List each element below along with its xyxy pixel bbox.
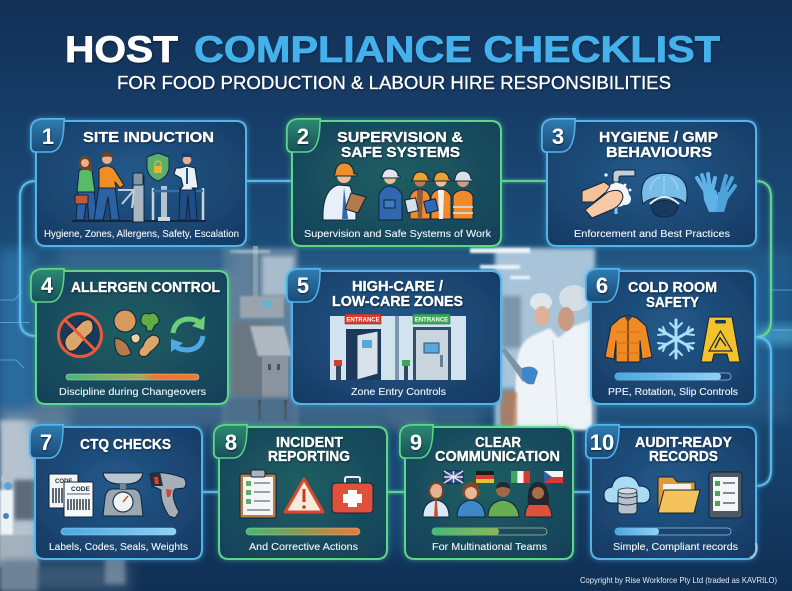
connector lines (20, 181, 771, 492)
icon: language flag bubbles (444, 471, 563, 483)
panel 2: supervision and safe systems (287, 119, 501, 246)
panel 10: audit-ready records: AUDIT-READY (635, 434, 732, 451)
panel 3: hygiene and GMP behaviours: HYGIENE / GMP (599, 129, 718, 146)
connector 7 to 8 (202, 491, 219, 493)
panel 6: cold room safety: SAFETY (646, 294, 699, 311)
panel 1: site induction (31, 119, 246, 246)
panel 5: high-care and low-care zones: HIGH-CARE / (352, 278, 444, 295)
panel 5: high-care and low-care zones (287, 269, 501, 404)
icon: warning triangle (285, 479, 323, 512)
panel 6: cold room safety: COLD ROOM (628, 279, 717, 296)
connector 1 to 2 (246, 180, 292, 182)
panel 9: clear communication: COMMUNICATION (435, 448, 560, 465)
panel 9: clear communication: CLEAR (475, 434, 521, 451)
icon: four multinational people (423, 482, 552, 517)
illustration: two zone entrances (330, 314, 466, 380)
panel 3: hygiene and GMP behaviours: 3 (552, 124, 564, 149)
panel 1: site induction: Hygiene, Zones, Allergens, Safety, Escalation (44, 228, 239, 240)
icon: gloves (697, 174, 735, 212)
icon: wet floor sign (701, 317, 740, 362)
panel 8: incident reporting: REPORTING (268, 448, 350, 465)
panel 8: incident reporting: INCIDENT (276, 434, 343, 451)
panel 1: site induction: SITE INDUCTION (83, 129, 214, 146)
icon: supervisor and workers (323, 163, 473, 220)
panel 1: site induction: 1 (42, 124, 54, 149)
connector 6 to 10 (755, 337, 771, 486)
panel 6: cold room safety (586, 269, 755, 404)
icon: cloud database (604, 476, 650, 514)
panel 2: supervision and safe systems: Supervision and Safe Systems of Work (304, 228, 492, 240)
icon: snowflake (658, 320, 694, 358)
icon: people at turnstile and security guard (72, 152, 206, 222)
background photo: factory floor (0, 246, 792, 591)
panel 4: allergen control: 4 (41, 273, 54, 298)
connector 1 to 4 (20, 181, 36, 336)
icon: barcode labels: CODE (55, 479, 72, 485)
panel 5: high-care and low-care zones: Zone Entry Controls (351, 386, 446, 398)
icon: barcode labels (49, 474, 93, 517)
lab at lower left (0, 405, 70, 429)
panel 10: audit-ready records: 10 (590, 430, 614, 455)
panel 7: CTQ checks: Labels, Codes, Seals, Weights (49, 541, 188, 553)
panel 3: hygiene and GMP behaviours (542, 119, 756, 246)
panel 9: clear communication (400, 425, 573, 559)
panel 7: CTQ checks: 7 (40, 430, 52, 455)
panel 6: cold room safety: PPE, Rotation, Slip Controls (608, 386, 738, 398)
panel 10: audit-ready records: RECORDS (649, 448, 718, 465)
panel 5: high-care and low-care zones: 5 (297, 273, 309, 298)
panel 4: allergen control (31, 269, 228, 404)
panel 7: CTQ checks: CTQ CHECKS (80, 436, 171, 453)
progress bar: 90 percent (615, 373, 731, 380)
circuit glow, left and right (0, 250, 792, 550)
icon: no peanuts (58, 314, 102, 356)
panel 9: clear communication: 9 (410, 430, 422, 455)
icon: changeover arrows (171, 316, 205, 352)
progress bar: 58 percent (432, 528, 547, 535)
icon: first aid kit (332, 477, 373, 513)
panel 5: high-care and low-care zones: LOW-CARE ZONES (332, 293, 463, 310)
panel 8: incident reporting: And Corrective Actions (249, 541, 358, 553)
icon: barcode scanner (150, 472, 186, 518)
lab room behind workers (495, 248, 595, 428)
icon: weighing scale (103, 473, 143, 516)
panel 6: cold room safety: 6 (596, 273, 608, 298)
illustration: two zone entrances: ENTRANCE (346, 318, 380, 324)
panel 8: incident reporting (214, 425, 387, 559)
progress bar: mixed green to orange (66, 374, 199, 380)
panel 9: clear communication: For Multinational Teams (432, 541, 547, 553)
progress bar: green to orange (246, 528, 360, 535)
panel 10: audit-ready records: Simple, Compliant records (613, 541, 738, 553)
panel 2: supervision and safe systems: 2 (297, 124, 309, 149)
panel 10: audit-ready records (586, 425, 757, 559)
panel 4: allergen control: ALLERGEN CONTROL (71, 279, 220, 296)
progress bar: full (61, 528, 176, 535)
panel 4: allergen control: Discipline during Changeovers (59, 386, 206, 398)
icon: tablet checklist (709, 472, 742, 518)
panel 3: hygiene and GMP behaviours: Enforcement and Best Practices (574, 228, 730, 240)
panel 3: hygiene and GMP behaviours: BEHAVIOURS (606, 144, 712, 161)
panel 8: incident reporting: 8 (225, 430, 237, 455)
icon: checklist clipboard (240, 470, 276, 518)
icon: hand washing (582, 170, 635, 218)
panel 2: supervision and safe systems: SUPERVISION & (337, 129, 463, 146)
icon: orange jacket (605, 315, 652, 362)
icon: hair net (642, 173, 687, 217)
connector 9 to 10 (573, 491, 591, 493)
title: HOST (65, 29, 178, 70)
connector 2 to 3 (501, 180, 547, 182)
workers in white coats (501, 285, 592, 430)
icon: barcode labels: CODE (71, 486, 90, 493)
subtitle: FOR FOOD PRODUCTION & LABOUR HIRE RESPONSIBILITIES (117, 73, 671, 93)
connector 3 to 6 (755, 181, 771, 337)
title: COMPLIANCE CHECKLIST (194, 29, 720, 70)
machine photo (222, 248, 298, 430)
progress bar: 38 percent (615, 528, 731, 535)
illustration: two zone entrances: ENTRANCE (415, 318, 448, 324)
panel 7: CTQ checks (30, 425, 202, 559)
icon: folder (658, 477, 700, 513)
icon: allergen foods (114, 310, 159, 356)
panel 2: supervision and safe systems: SAFE SYSTEMS (341, 144, 460, 161)
connector 8 to 9 (387, 491, 405, 493)
